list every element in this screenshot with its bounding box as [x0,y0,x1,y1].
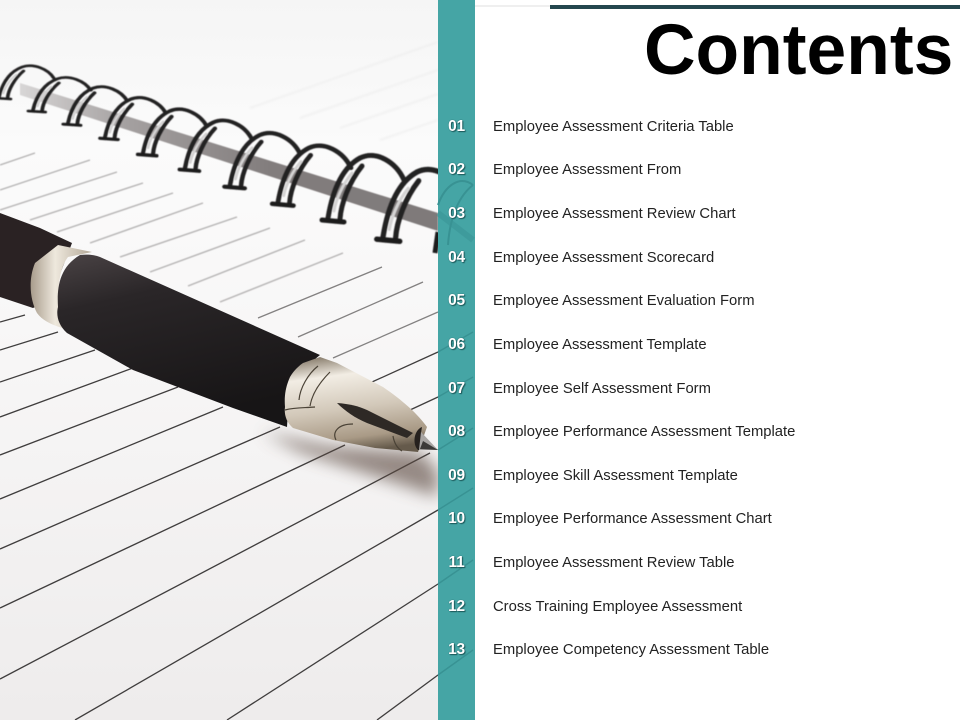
item 01: 01 [448,118,465,135]
paper background [0,0,438,720]
tip reflection [337,403,413,438]
item 04: 04 [448,249,465,266]
item 13: 13 [448,641,465,658]
ruled lines below pen [0,315,438,720]
top thin light line [475,5,550,7]
item 11: 11 [448,554,464,571]
item 06: Employee Assessment Template [493,337,707,353]
item 10: Employee Performance Assessment Chart [493,511,772,527]
ruled lines above pen [0,153,343,302]
item 04: Employee Assessment Scorecard [493,250,714,266]
item 07: Employee Self Assessment Form [493,381,711,397]
contents list [448,118,795,658]
item 13: Employee Competency Assessment Table [493,642,769,658]
item 09: 09 [448,467,465,484]
spiral rings [0,66,463,253]
title: Contents [644,10,953,90]
item 08: 08 [448,423,465,440]
pen metal tip [285,357,427,452]
pen rear barrel [0,213,72,308]
item 12: Cross Training Employee Assessment [493,599,742,615]
pen [0,213,438,452]
tip engraved lines [285,366,402,451]
top accent line [550,5,960,9]
pen shadow [262,432,438,497]
item 10: 10 [448,510,465,527]
item 03: 03 [448,205,465,222]
item 01: Employee Assessment Criteria Table [493,119,734,135]
item 11: Employee Assessment Review Table [493,555,735,571]
item 02: 02 [448,161,465,178]
binding rod [20,83,438,231]
teal sidebar [438,0,475,720]
item 03: Employee Assessment Review Chart [493,206,736,222]
pen silver band [31,245,92,328]
faint lines on upper page [250,42,438,140]
item 06: 06 [448,336,465,353]
item 09: Employee Skill Assessment Template [493,468,738,484]
item 02: Employee Assessment From [493,162,681,178]
pen grip [57,255,320,427]
item 05: 05 [448,292,465,309]
item 05: Employee Assessment Evaluation Form [493,293,755,309]
faint lines showing through sidebar [438,181,473,675]
pen collar and point [415,427,423,450]
item 07: 07 [448,380,465,397]
item 08: Employee Performance Assessment Template [493,424,795,440]
item 12: 12 [448,598,465,615]
